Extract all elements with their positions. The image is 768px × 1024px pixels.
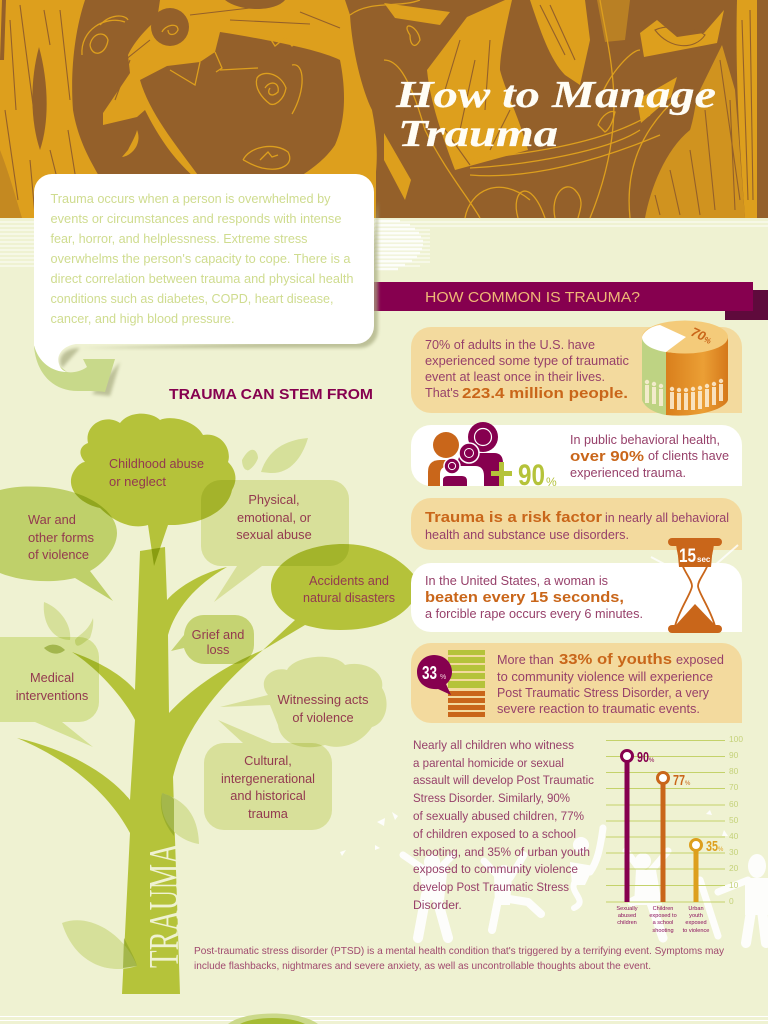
bubble: medical interventions [0, 637, 99, 747]
bubble: grief and loss: Grief and [192, 627, 244, 642]
gold shapes on brown [122, 0, 757, 218]
panel: risk factor: in nearly all behavioral [605, 511, 729, 525]
bubble: accidents and natural disasters [263, 544, 414, 650]
arrow: green curl [34, 346, 115, 392]
bubble: cultural, intergenerational and historical trauma: Cultural, [244, 753, 292, 768]
leaves [44, 438, 308, 969]
text: children witness: Stress Disorder. Similarly, 90% [413, 791, 570, 805]
chart: lollipop: 90 [729, 750, 739, 760]
panel: 70 percent of adults: 223.4 million people. [462, 385, 628, 402]
bubble: war and other forms of violence: other forms [28, 530, 94, 545]
chart: lollipop: 60 [729, 799, 739, 809]
bar: 77 percent: Children [653, 906, 673, 912]
bar: 77 percent: 77 [673, 772, 685, 789]
section banner: how common is trauma [372, 282, 768, 320]
leaf overlaps [44, 645, 174, 968]
text: ptsd definition [194, 946, 725, 972]
text: children witness: develop Post Traumatic Stress [413, 880, 569, 894]
panel: over 90 percent of clients: of clients have [648, 449, 729, 463]
bubble: medical interventions: Medical [30, 670, 74, 685]
stat: 90 percent [491, 459, 557, 492]
bubble: childhood abuse: Childhood abuse [109, 456, 204, 471]
bar: 35 percent: Urban [688, 906, 704, 912]
panel: 70 percent of adults [411, 320, 742, 416]
panel: 15 seconds: a forcible rape occurs every 6 minutes. [425, 607, 643, 621]
footer stripes and arc [0, 1014, 768, 1024]
chart: stripes [448, 650, 485, 717]
text: children witness: Nearly all children who witness [413, 738, 574, 752]
icon: hourglass: 15 [679, 546, 696, 567]
bubble: cultural, intergenerational and historical trauma: and historical [230, 788, 306, 803]
brown right half [345, 0, 768, 218]
panel: 33 percent of youths: More than [497, 653, 554, 667]
panel: 15 seconds: beaten every 15 seconds, [425, 589, 624, 606]
text: ptsd definition: Post-traumatic stress disorder (PTSD) is a mental health condition that's triggered by a terrifying event. Symptoms may [194, 946, 725, 957]
bubble: war and other forms of violence: War and [28, 512, 76, 527]
bubble: war and other forms of violence: of violence [28, 547, 89, 562]
panel: 33 percent of youths: exposed [676, 653, 724, 667]
stat: 90 percent: 90 [518, 459, 545, 492]
bar: 77 percent: shooting [652, 928, 674, 934]
intro speech box: cancer, and high blood pressure. [50, 311, 234, 326]
text: children witness: shooting, and 35% of urban youth [413, 845, 590, 859]
stripes [0, 222, 768, 266]
section banner: how common is trauma: HOW COMMON IS TRAUMA? [425, 289, 640, 306]
bubble: childhood abuse [71, 414, 235, 566]
title [395, 74, 716, 155]
icon: family [428, 422, 503, 486]
bubble: physical, emotional or sexual abuse: emotional, or [237, 510, 312, 525]
panel: 70 percent of adults: 70% of adults in the U.S. have [425, 338, 595, 352]
intro speech box [34, 174, 378, 396]
panel: 70 percent of adults: That's [425, 386, 459, 400]
chart: lollipop: 0 [729, 896, 734, 906]
panel: 70 percent of adults: event at least once in their lives. [425, 370, 605, 384]
panel: 70 percent of adults: experienced some type of traumatic [425, 354, 629, 368]
chart: lollipop: 30 [729, 847, 739, 857]
bubble: physical, emotional or sexual abuse [201, 480, 349, 602]
intro speech box: conditions such as diabetes, COPD, heart disease, [50, 291, 334, 306]
bar: 35 percent: exposed [685, 920, 707, 926]
panel: risk factor: Trauma is a risk factor [425, 509, 602, 526]
icon: 33 percent bubble [417, 655, 452, 695]
bar: 35 percent: % [718, 847, 724, 853]
chart: lollipop [606, 734, 743, 934]
bubble: grief and loss: loss [207, 642, 229, 657]
decorative striped curl [375, 221, 423, 269]
chart: lollipop: 20 [729, 863, 739, 873]
bar: 35 percent: youth [689, 913, 703, 919]
bar: 90 percent: children [617, 920, 637, 926]
bar: 77 percent: a school [653, 920, 673, 926]
face [140, 32, 344, 178]
stat: 90 percent: % [546, 475, 557, 489]
bubble: witnessing acts of violence [220, 657, 387, 747]
trunk label: TRAUMA [142, 843, 188, 968]
bar: 77 percent: exposed to [649, 913, 677, 919]
panel: 33 percent of youths: Post Traumatic Stress Disorder, a very [497, 686, 710, 700]
panel: 33 percent of youths [411, 643, 742, 723]
panel: risk factor: health and substance use disorders. [425, 528, 629, 542]
chart: lollipop: 100 [729, 734, 743, 744]
intro speech box: events or circumstances and responds with intense [50, 211, 342, 226]
panel: over 90 percent of clients: over 90% [570, 448, 644, 465]
bar: 77 percent [649, 772, 691, 934]
bar: 77 percent: % [685, 781, 691, 787]
bubble: physical, emotional or sexual abuse: Physical, [248, 492, 300, 507]
silhouettes of children [340, 810, 768, 943]
engraved hatching brown [5, 5, 753, 215]
text: children witness [413, 738, 594, 912]
bubble: childhood abuse: or neglect [109, 474, 166, 489]
bar: 35 percent: to violence [683, 928, 709, 934]
text: children witness: of children exposed to a school [413, 827, 576, 841]
panel: risk factor [411, 498, 742, 550]
panel: 33 percent of youths: severe reaction to traumatic events. [497, 702, 700, 716]
trunk [17, 547, 263, 994]
bar: 35 percent [683, 838, 724, 934]
bubble: physical, emotional or sexual abuse: sexual abuse [236, 527, 312, 542]
bar: 90 percent: Sexually [616, 906, 638, 912]
header illustration [0, 0, 768, 218]
bubble: witnessing acts of violence: of violence [292, 710, 354, 725]
left crescent [72, 0, 195, 178]
engraved lines gold [82, 0, 680, 218]
text: children witness: exposed to community violence [413, 862, 578, 876]
icon: pie cylinder: 70% [689, 324, 715, 347]
intro speech box: direct correlation between trauma and physical health [50, 271, 354, 286]
title: How to Manage [395, 74, 716, 116]
intro speech box: fear, horror, and helplessness. Extreme stress [50, 231, 308, 246]
chart: lollipop: 10 [729, 880, 739, 890]
icon: hourglass: sec [697, 555, 711, 564]
bubble: war and other forms of violence [0, 486, 117, 601]
bubble: cultural, intergenerational and historical trauma: intergenerational [221, 771, 315, 786]
panel: 33 percent of youths: 33% of youths [559, 651, 672, 668]
chart: lollipop: 50 [729, 815, 739, 825]
bubble: cultural, intergenerational and historical trauma [204, 720, 332, 830]
panel: 15 seconds [411, 563, 742, 632]
bubble: cultural, intergenerational and historical trauma: trauma [248, 806, 289, 821]
chart: lollipop: 70 [729, 782, 739, 792]
heading: trauma can stem from: TRAUMA CAN STEM FROM [169, 386, 373, 403]
panel: 33 percent of youths: to community violence will experience [497, 670, 713, 684]
bar: 90 percent: 90 [637, 749, 649, 766]
panel: over 90 percent of clients: In public behavioral health, [570, 433, 720, 447]
panel: over 90 percent of clients [411, 422, 742, 492]
text: children witness: a parental homicide or sexual [413, 756, 564, 770]
bar: 90 percent: % [649, 758, 655, 764]
bubble: witnessing acts of violence: Witnessing acts [278, 692, 368, 707]
bubble: accidents and natural disasters: Accidents and [309, 573, 389, 588]
bubble: grief and loss [171, 615, 254, 664]
title: Trauma [398, 113, 558, 155]
tree [17, 547, 263, 994]
text: ptsd definition: include flashbacks, nightmares and severe anxiety, as well as uncontrollable thoughts about the event. [194, 961, 651, 972]
icon: 33 percent bubble: % [440, 674, 446, 681]
bubble: accidents and natural disasters: natural disasters [303, 590, 395, 605]
panel: over 90 percent of clients: experienced trauma. [570, 466, 686, 480]
icon: pie cylinder [642, 320, 728, 416]
intro speech box: overwhelms the person's capacity to cope. There is a [50, 251, 351, 266]
intro speech box: Trauma occurs when a person is overwhelmed by [50, 191, 331, 206]
icon: 33 percent bubble: 33 [422, 663, 437, 683]
text: children witness: assault will develop Post Traumatic [413, 773, 594, 787]
chart: lollipop: 40 [729, 831, 739, 841]
bar: 90 percent [616, 749, 655, 926]
bar: 35 percent: 35 [706, 838, 718, 855]
bubble: medical interventions: interventions [16, 688, 88, 703]
chart: lollipop: 80 [729, 766, 739, 776]
text: children witness: of sexually abused children, 77% [413, 809, 584, 823]
panel: 15 seconds: In the United States, a woman is [425, 574, 608, 588]
bar: 90 percent: abused [618, 913, 636, 919]
text: children witness: Disorder. [413, 898, 462, 912]
icon: hourglass [651, 538, 738, 633]
